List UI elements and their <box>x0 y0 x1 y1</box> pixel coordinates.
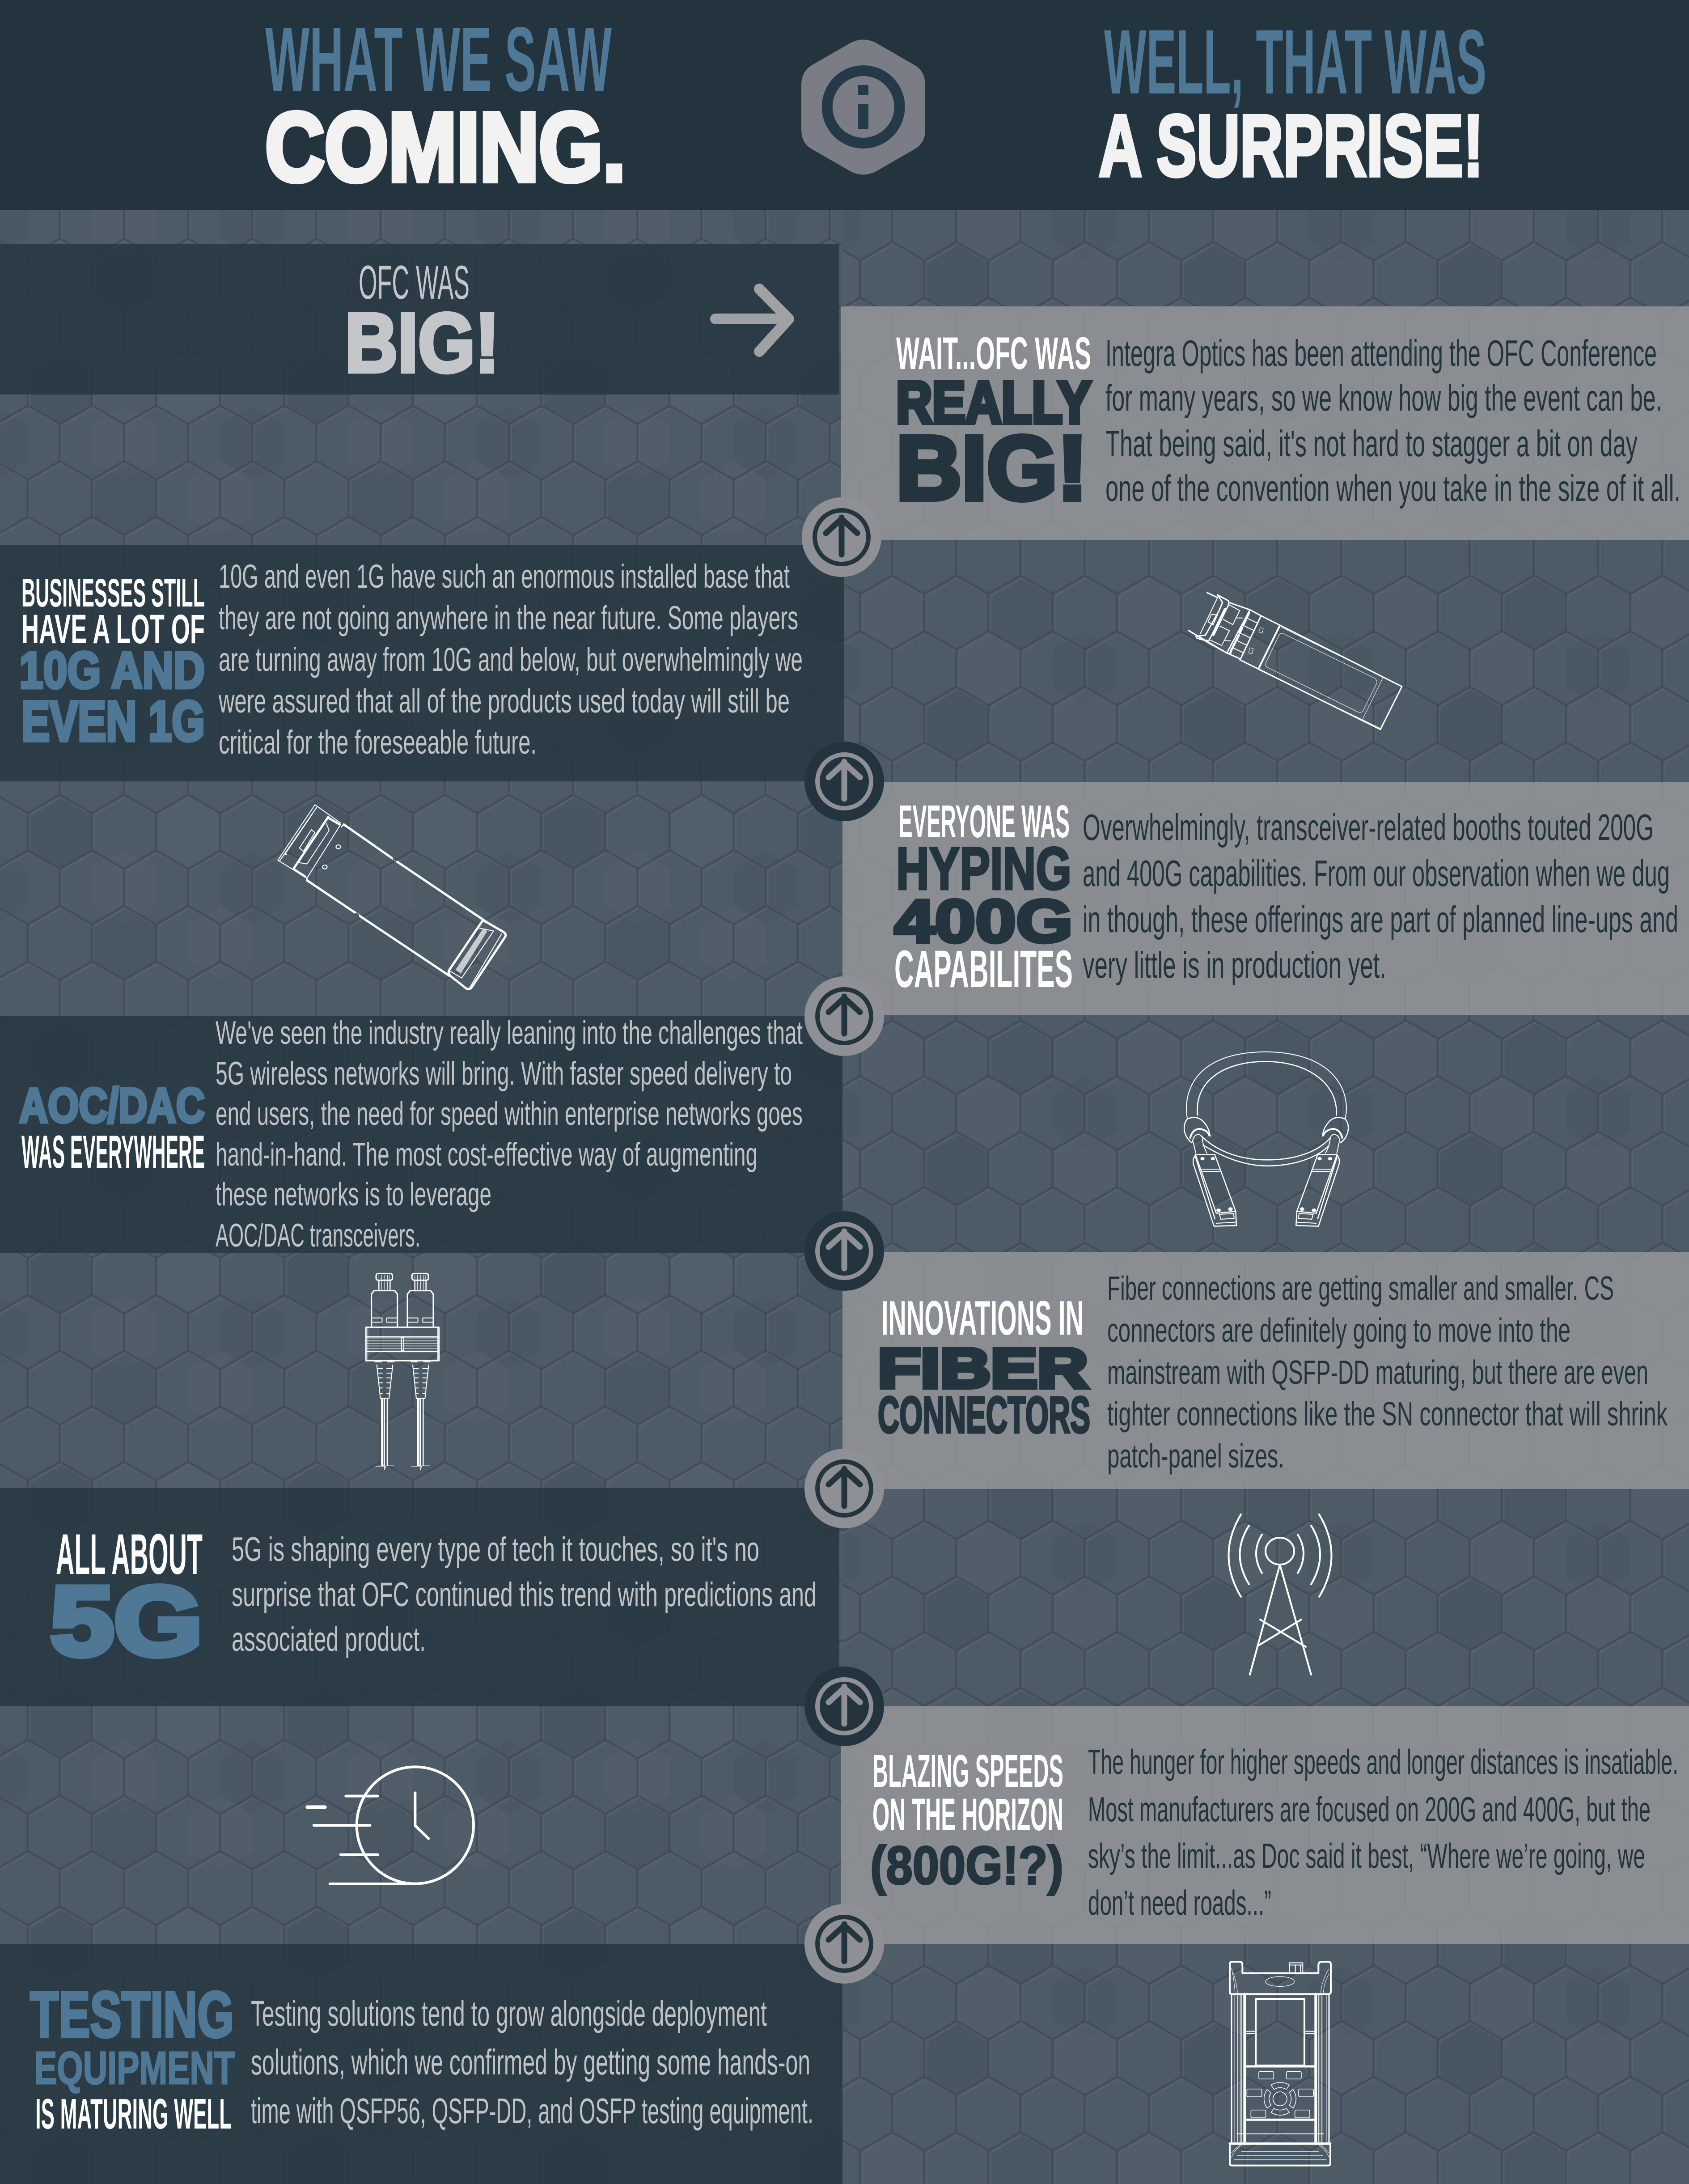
heading: FIBER <box>878 1337 1088 1399</box>
heading <box>345 255 500 390</box>
panel: blazing speeds: ON THE HORIZON <box>872 1789 1063 1840</box>
icon: fiber connector <box>366 1273 439 1470</box>
title: left: WHAT WE SAW <box>265 8 612 110</box>
icon: up arrow badge 4 <box>804 1211 884 1291</box>
title: right: A SURPRISE! <box>1099 97 1483 195</box>
icon: up arrow badge 7 <box>804 1904 884 1984</box>
heading: HYPING <box>896 835 1071 902</box>
body text: end users, the need for speed within enterprise networks goes <box>216 1096 803 1132</box>
heading: WAIT...OFC WAS <box>896 328 1091 379</box>
heading <box>896 328 1091 518</box>
panel: hyping 400G: EVERYONE WAS <box>898 796 1070 847</box>
body text: 10G and even 1G have such an enormous installed base that <box>219 558 790 595</box>
heading: EQUIPMENT <box>34 2042 235 2094</box>
icon: up arrow badge 6 <box>804 1667 884 1746</box>
heading: 10G AND <box>19 642 205 699</box>
arrow <box>715 289 789 352</box>
panel: 10G and even 1G <box>0 545 844 781</box>
heading: REALLY <box>896 369 1091 435</box>
panel: hyping 400G <box>842 782 1689 1015</box>
body text <box>251 1993 813 2131</box>
body text: AOC/DAC transceivers. <box>216 1217 420 1254</box>
icon: up arrow badge 5 <box>804 1449 884 1528</box>
heading <box>51 1522 203 1676</box>
heading: INNOVATIONS IN <box>881 1291 1084 1345</box>
heading <box>894 796 1073 999</box>
body text: Testing solutions tend to grow alongside deployment <box>251 1993 767 2033</box>
body text <box>1107 1269 1668 1475</box>
icon: up arrow badge 3 <box>804 976 884 1056</box>
heading: CONNECTORS <box>878 1387 1090 1444</box>
body text <box>1105 332 1681 509</box>
body text: hand-in-hand. The most cost-effective way of augmenting <box>216 1137 758 1173</box>
panel: AOC/DAC was everywhere: WAS EVERYWHERE <box>21 1126 205 1178</box>
body text: they are not going anywhere in the near future. Some players <box>219 599 798 636</box>
icon: info hexagon <box>801 39 925 174</box>
heading <box>19 1078 205 1178</box>
title: left <box>265 8 626 202</box>
heading: CAPABILITES <box>894 940 1073 999</box>
heading: 400G <box>894 887 1073 955</box>
header band <box>0 0 1689 210</box>
body text: solutions, which we confirmed by getting some hands-on <box>251 2042 810 2082</box>
panel: testing equipment: IS MATURING WELL <box>35 2090 232 2138</box>
heading: HAVE A LOT OF <box>21 606 205 652</box>
body text <box>218 558 803 761</box>
body text: We've seen the industry really leaning into the challenges that <box>216 1015 803 1051</box>
heading: (800G!?) <box>870 1836 1063 1896</box>
heading: BIG! <box>896 417 1088 518</box>
heading <box>30 1978 235 2138</box>
body text: very little is in production yet. <box>1083 944 1386 986</box>
icon: handheld tester <box>1230 1962 1331 2166</box>
icon: up arrow badge 1 <box>802 497 881 577</box>
panel: AOC/DAC was everywhere <box>0 1015 842 1254</box>
panel: all about 5G <box>0 1488 839 1706</box>
title: right <box>1099 11 1486 195</box>
body text <box>216 1015 803 1254</box>
icon: SFP transceiver (left) <box>278 805 506 989</box>
body text <box>232 1531 817 1658</box>
panel: innovations in fiber connectors <box>842 1252 1689 1489</box>
heading <box>878 1291 1090 1444</box>
heading: AOC/DAC <box>19 1078 205 1133</box>
panel: blazing speeds: BLAZING SPEEDS <box>872 1745 1063 1797</box>
heading: TESTING <box>30 1978 234 2051</box>
icon: speeding clock <box>307 1767 474 1884</box>
body text <box>1083 806 1678 986</box>
body text: 5G is shaping every type of tech it touches, so it's no <box>232 1531 759 1569</box>
body text: 5G wireless networks will bring. With faster speed delivery to <box>216 1056 792 1092</box>
body text: these networks is to leverage <box>216 1176 491 1213</box>
body text: don’t need roads...” <box>1088 1883 1271 1922</box>
panel: all about 5G: ALL ABOUT <box>56 1522 203 1586</box>
icon: cell tower <box>1229 1514 1332 1675</box>
heading: BIG! <box>345 296 500 390</box>
title: left: COMING. <box>265 93 626 202</box>
icon: up arrow badge 2 <box>804 742 884 821</box>
panel: really big <box>841 306 1689 540</box>
heading: OFC WAS <box>359 255 470 309</box>
body text <box>1088 1742 1678 1922</box>
heading <box>870 1745 1063 1896</box>
body text: patch-panel sizes. <box>1107 1437 1284 1475</box>
body text: were assured that all of the products used today will still be <box>218 683 790 720</box>
body text: associated product. <box>232 1620 426 1658</box>
panel: blazing speeds <box>841 1706 1689 1944</box>
heading: EVEN 1G <box>21 690 205 753</box>
body text: surprise that OFC continued this trend with predictions and <box>232 1576 817 1614</box>
panel: testing equipment <box>0 1944 842 2184</box>
body text: critical for the foreseeable future. <box>219 724 537 761</box>
icon: AOC/DAC cable <box>1184 1052 1348 1226</box>
icon: SFP transceiver (right) <box>1188 593 1402 729</box>
heading <box>19 570 205 753</box>
heading: 5G <box>51 1567 203 1676</box>
body text: time with QSFP56, QSFP-DD, and OSFP testing equipment. <box>251 2091 813 2131</box>
panel: OFC was big <box>0 244 839 394</box>
body text: are turning away from 10G and below, but overwhelmingly we <box>219 641 803 678</box>
panel: 10G and even 1G: BUSINESSES STILL <box>21 570 205 615</box>
